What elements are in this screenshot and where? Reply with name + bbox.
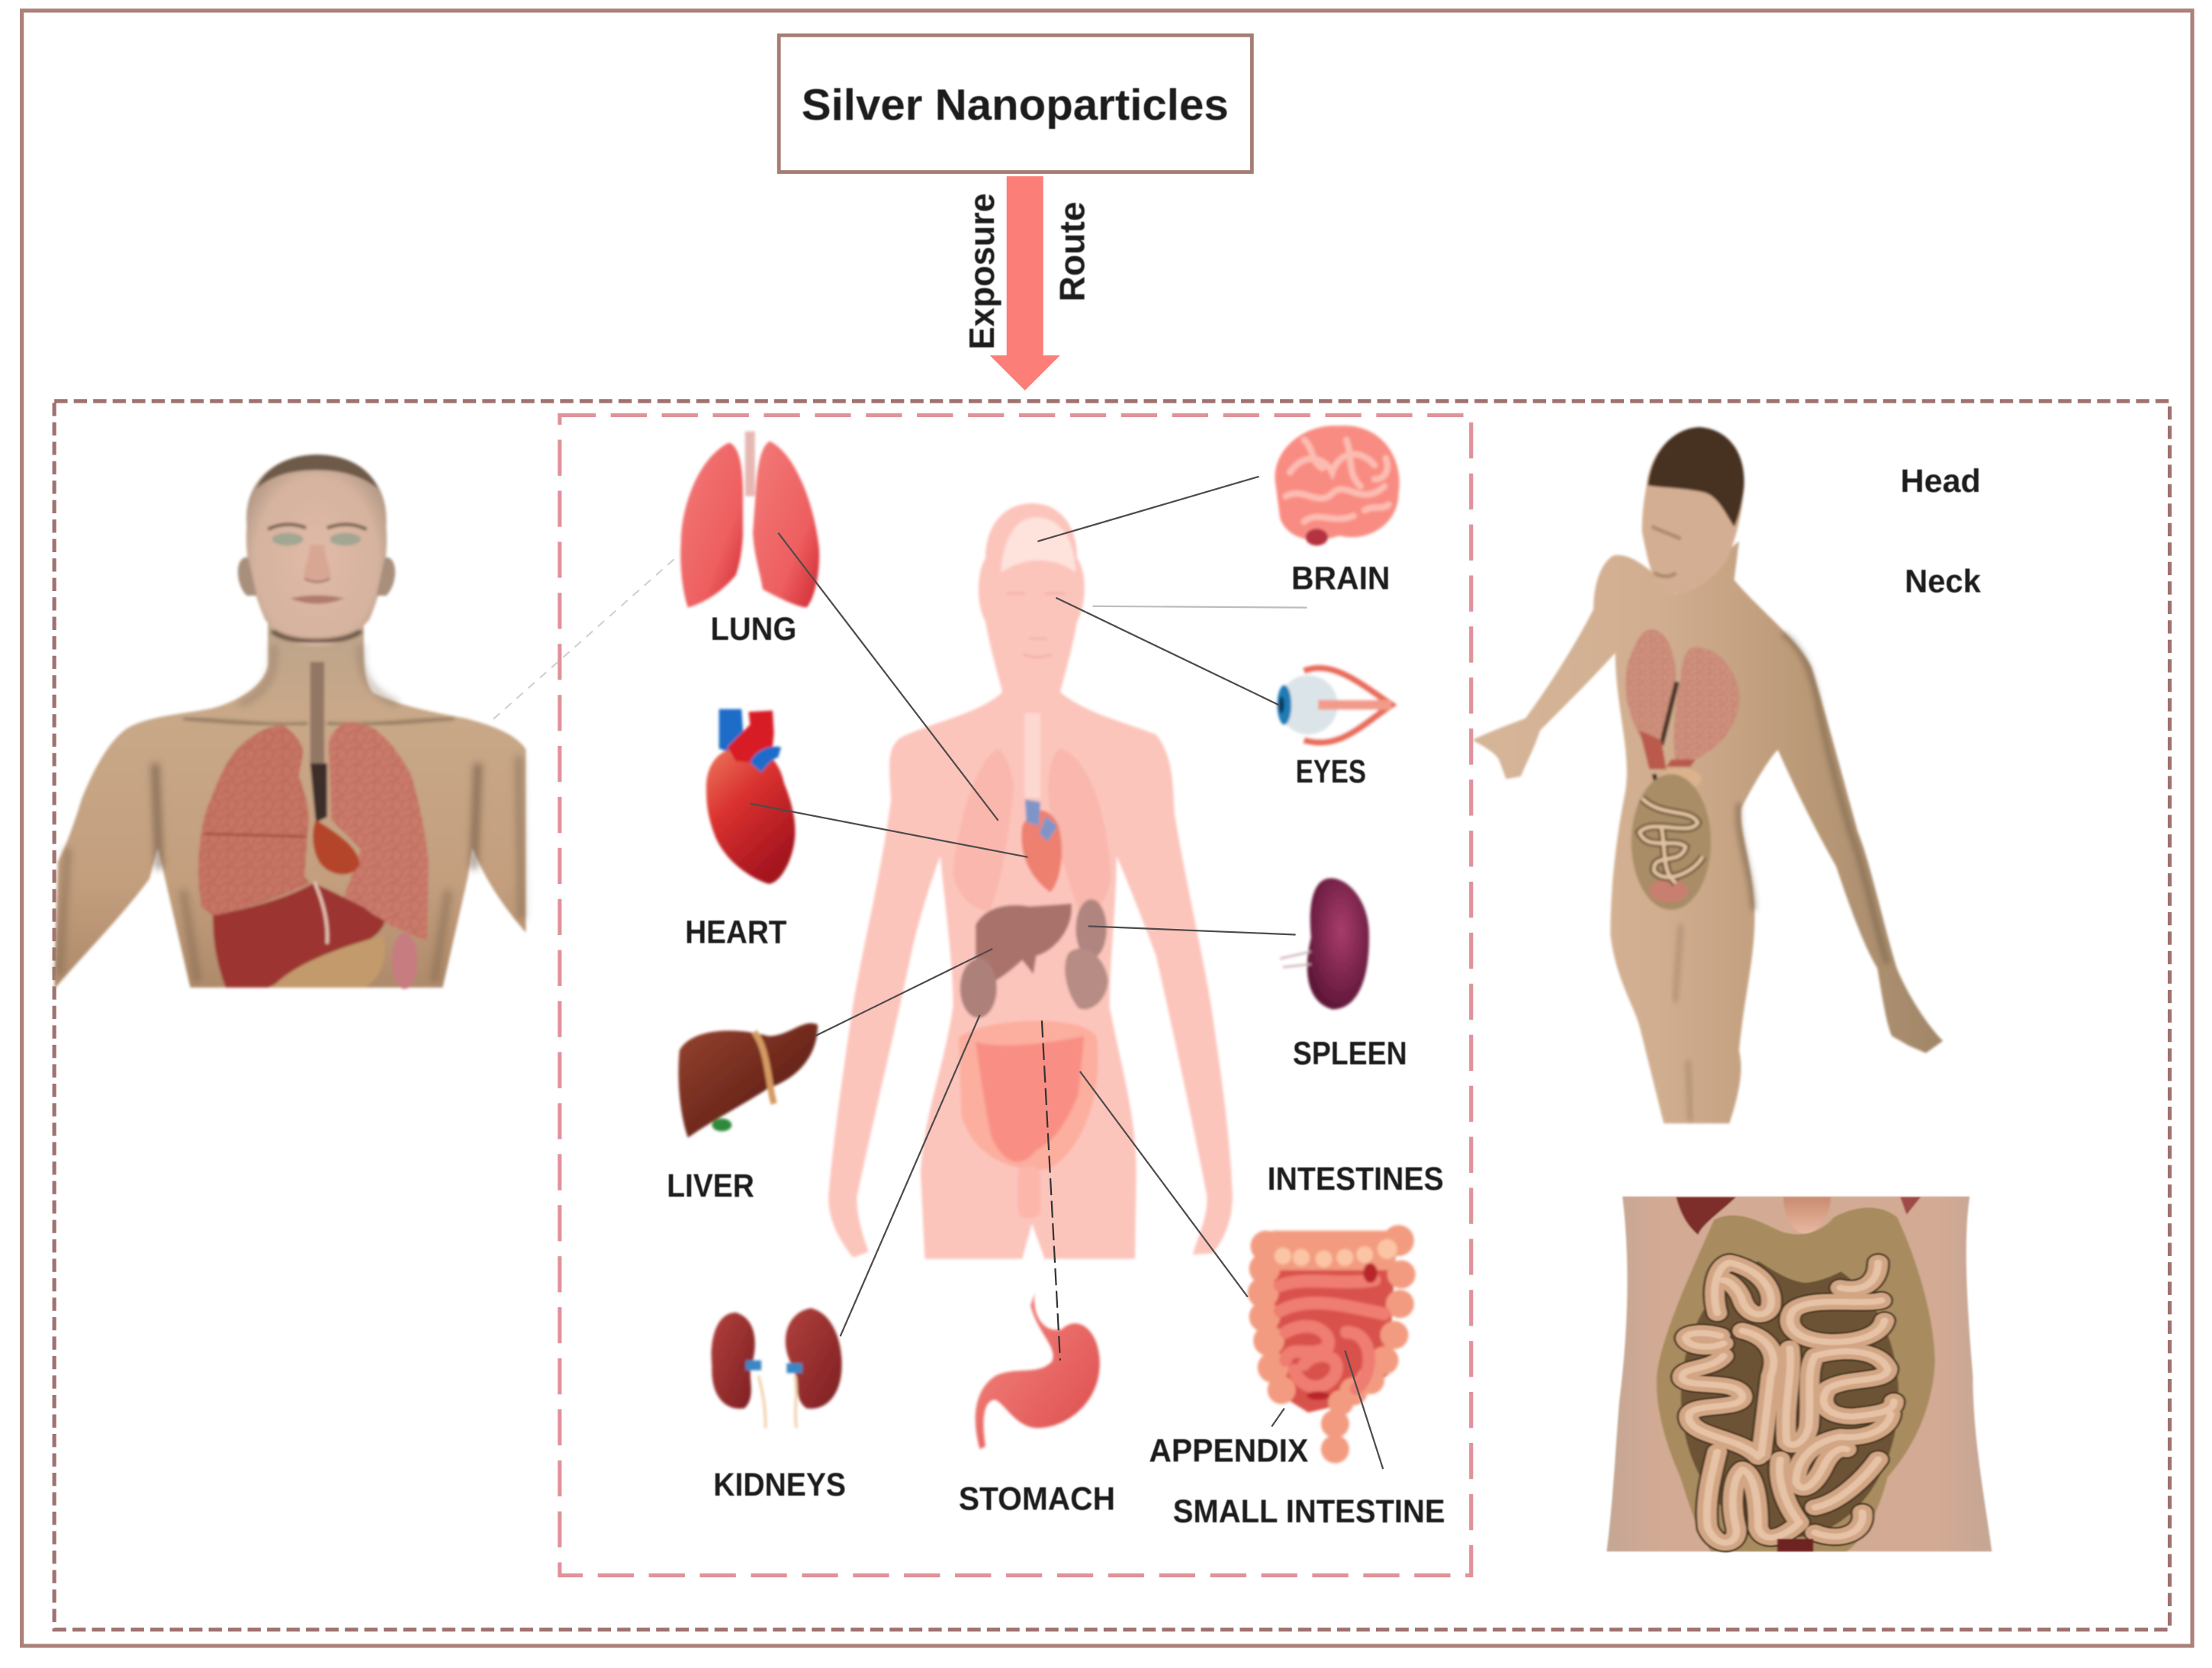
appendix <box>1328 1390 1353 1416</box>
stomach <box>272 935 385 988</box>
line: lung <box>778 533 998 821</box>
heart <box>313 820 359 874</box>
label: Exposure: Exposure <box>962 193 1002 349</box>
line: brain <box>1037 477 1259 542</box>
stomach <box>1783 1197 1831 1234</box>
collar shadow <box>183 718 454 725</box>
icon: kidneys <box>712 1308 842 1428</box>
line: kidney <box>841 1015 980 1336</box>
line: stomach <box>1042 1020 1060 1361</box>
upper omentum band <box>1727 1227 1875 1283</box>
liver <box>976 904 1072 988</box>
lungs <box>953 748 1111 912</box>
body <box>1472 542 1943 1123</box>
stomach <box>1661 768 1701 789</box>
neck shading <box>240 645 397 704</box>
lung right side of body <box>198 725 310 916</box>
line: small intestine <box>1345 1351 1383 1469</box>
label: Head: Head <box>1901 464 1981 500</box>
right organ <box>1900 1197 1921 1215</box>
label: SPLEEN: SPLEEN <box>1293 1036 1407 1072</box>
armpit shading <box>155 763 478 869</box>
liver <box>1676 1197 1736 1235</box>
small intestine <box>976 1036 1084 1162</box>
omentum <box>1657 1207 1935 1551</box>
body outline <box>828 503 1233 1259</box>
icon: stomach <box>976 1293 1100 1449</box>
organ labels <box>667 561 1445 1530</box>
label: LUNG: LUNG <box>711 612 796 648</box>
liver <box>213 883 385 988</box>
dashed pointer line <box>494 557 677 719</box>
label: LIVER: LIVER <box>667 1168 754 1204</box>
figure: male chest with lungs <box>54 455 526 989</box>
label: Neck: Neck <box>1905 564 1981 599</box>
line: liver <box>815 949 992 1036</box>
spleen <box>1075 899 1107 959</box>
label: BRAIN: BRAIN <box>1291 561 1390 597</box>
ears <box>238 558 395 596</box>
leg gap <box>1675 924 1690 1121</box>
lung left side of body <box>329 722 429 941</box>
lung fissure <box>204 834 306 837</box>
large intestine <box>959 1020 1098 1170</box>
label: SMALL INTESTINE: SMALL INTESTINE <box>1173 1494 1445 1530</box>
icon: brain <box>1275 426 1400 545</box>
face features <box>1651 526 1681 577</box>
face lines <box>1007 593 1066 657</box>
hair <box>1648 427 1744 526</box>
spleen <box>392 933 417 989</box>
central human body figure <box>828 503 1233 1259</box>
side shading <box>59 757 522 982</box>
head <box>1642 427 1744 594</box>
title box: Silver Nanoparticles: Silver Nanoparticles <box>802 81 1229 130</box>
mediastinum <box>1661 682 1677 745</box>
jaw shadow <box>272 631 361 641</box>
icon: lung <box>680 432 819 608</box>
intestines <box>1632 774 1711 910</box>
icon: eye <box>1278 668 1391 742</box>
line: spleen <box>1088 926 1296 934</box>
icon: heart <box>706 709 795 884</box>
label: APPENDIX: APPENDIX <box>1149 1434 1308 1470</box>
abdomen skin <box>1606 1197 1992 1551</box>
body shadow right <box>1738 633 1887 963</box>
gaps between coils <box>1681 1255 1899 1538</box>
title box: Silver Nanoparticles <box>779 35 1252 172</box>
line: heart <box>750 804 1027 857</box>
figure: abdomen with small intestine <box>1606 1197 1992 1551</box>
small intestine coils <box>1280 1280 1384 1389</box>
trachea <box>1025 713 1040 798</box>
label: Route: Route <box>1052 201 1092 302</box>
label: EYES: EYES <box>1296 754 1366 790</box>
label: HEART: HEART <box>685 915 786 951</box>
head <box>246 455 387 646</box>
label: INTESTINES: INTESTINES <box>1268 1162 1444 1197</box>
line: intestines <box>1080 1072 1248 1297</box>
icon: spleen <box>1280 878 1369 1009</box>
right kidney <box>1065 949 1108 1009</box>
heart <box>1021 810 1062 892</box>
nose <box>304 545 330 580</box>
forehead highlight <box>1001 517 1075 572</box>
connector lines <box>750 477 1383 1469</box>
line: eye <box>1056 598 1278 705</box>
mouth <box>291 595 344 604</box>
torso and arms <box>54 622 526 989</box>
inner dashed panel: organs <box>560 415 1471 1576</box>
icon: liver <box>678 1024 818 1138</box>
brows <box>268 525 367 529</box>
colon right <box>1383 1225 1414 1256</box>
line: head <box>1092 606 1307 608</box>
label: KIDNEYS: KIDNEYS <box>713 1467 846 1503</box>
falciform ligament <box>314 882 327 943</box>
figure: male with exposed organs <box>1472 427 1943 1123</box>
left kidney <box>960 959 997 1018</box>
liver <box>1640 731 1696 770</box>
pelvic shadow <box>1777 1539 1813 1551</box>
colon top <box>1266 1231 1396 1270</box>
hair <box>256 455 378 488</box>
heart vessels <box>1025 799 1057 841</box>
intestine coils <box>1682 1262 1894 1543</box>
bronchi <box>310 763 327 823</box>
outer dashed panel <box>54 401 2170 1630</box>
trachea <box>310 662 324 763</box>
label: STOMACH: STOMACH <box>959 1482 1115 1518</box>
lungs <box>1625 629 1739 764</box>
icon: intestines <box>1248 1225 1416 1464</box>
arrow: exposure route <box>990 176 1060 390</box>
line: appendix <box>1272 1409 1284 1427</box>
eyes <box>272 533 361 545</box>
colon left <box>1250 1231 1281 1261</box>
rectum <box>1018 1166 1040 1218</box>
